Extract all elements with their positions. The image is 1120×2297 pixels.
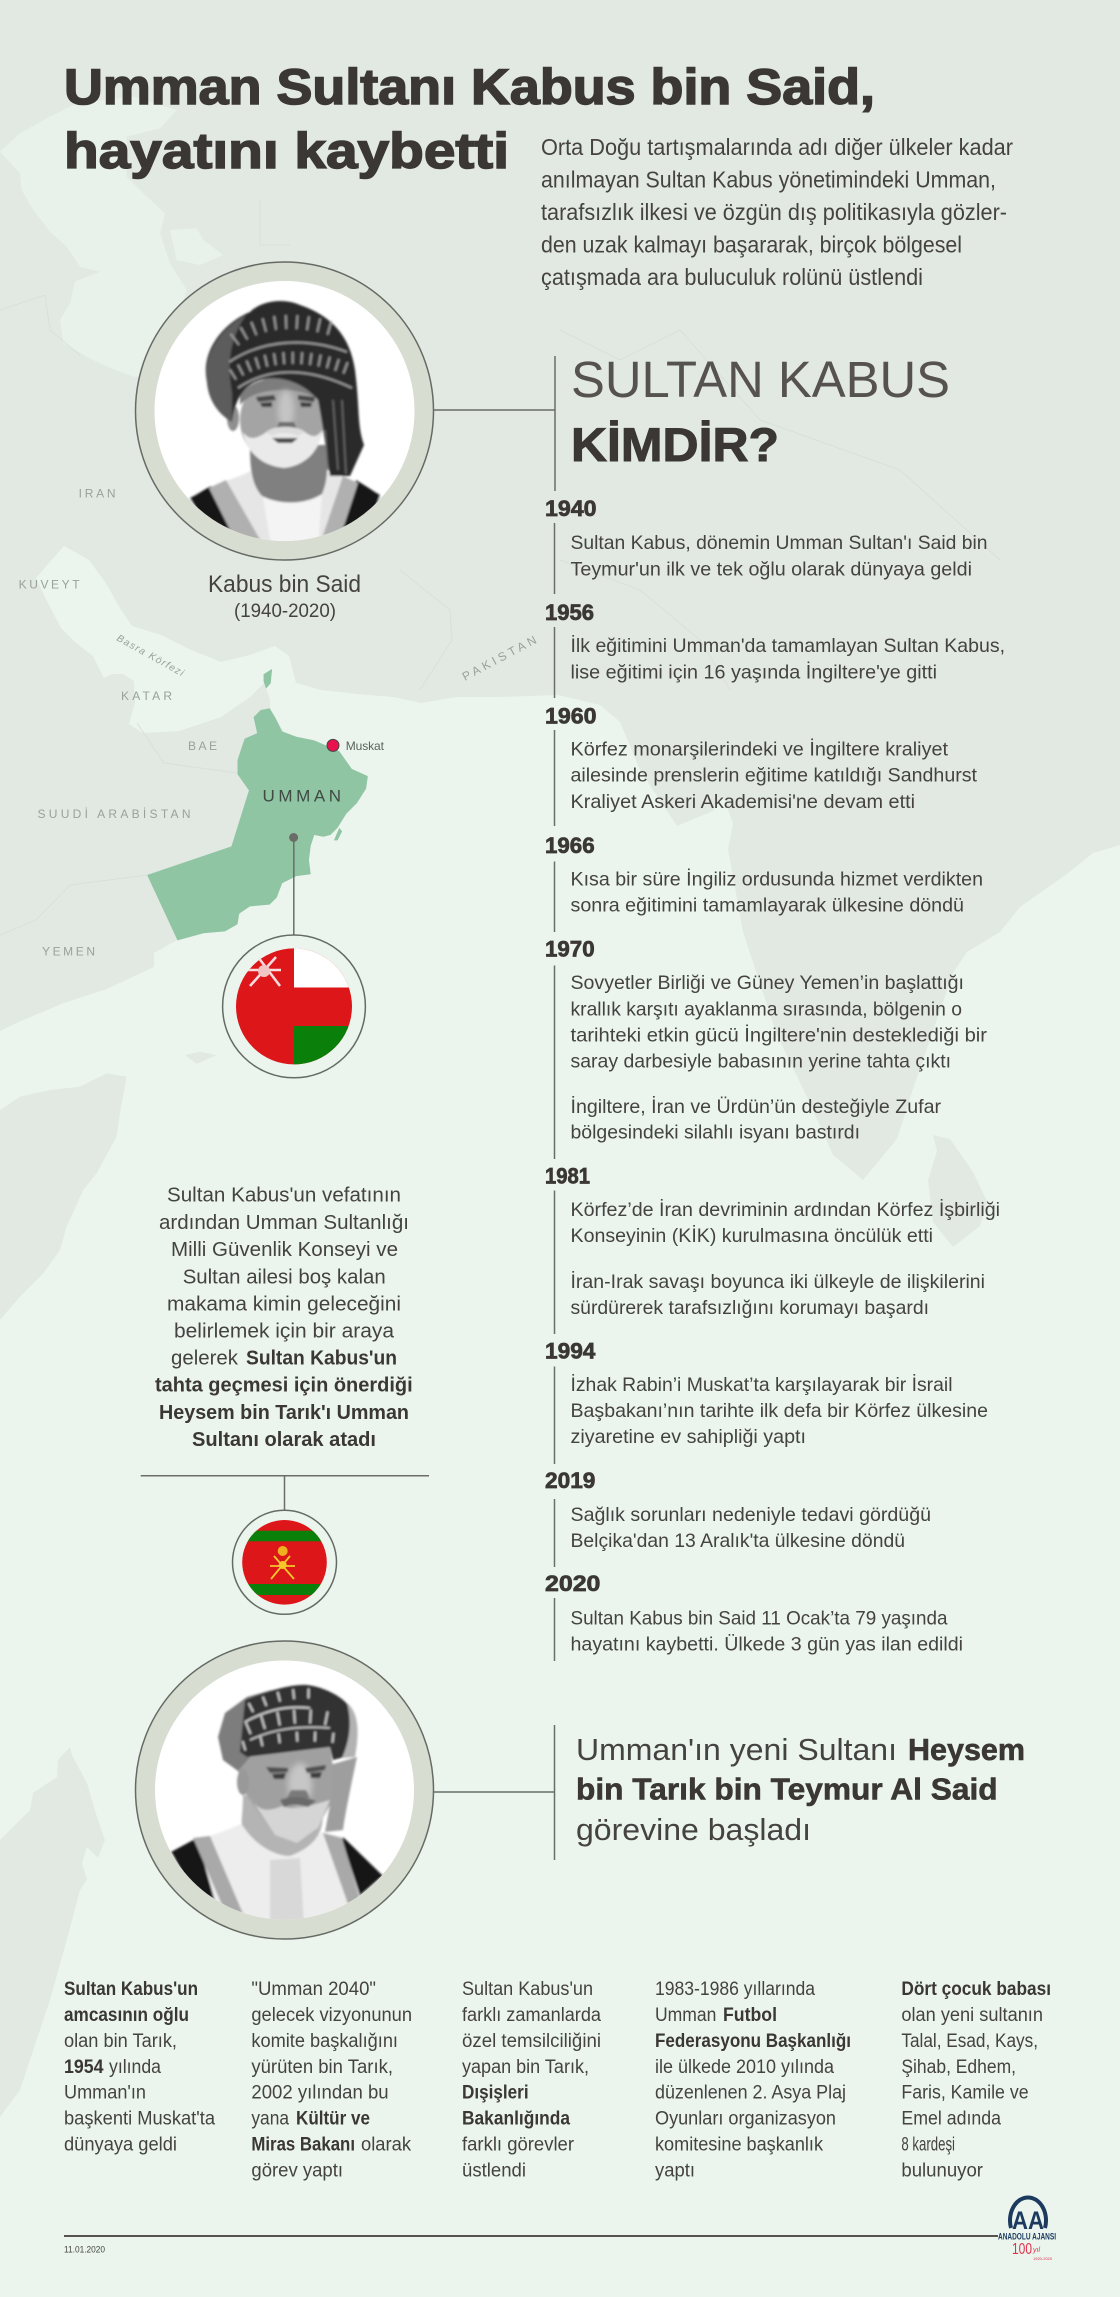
timeline: 1966: Kısa bir süre İngiliz ordusunda hizmet verdikten: [570, 868, 983, 891]
map labels: KUVEYT: [19, 578, 80, 592]
bio column 5: olan yeni sultanın: [901, 2005, 1043, 2026]
timeline: 1960: ailesinde prenslerin eğitime katıldığı Sandhurst: [570, 765, 978, 787]
timeline: 1956: 1956: [545, 600, 594, 625]
succession text block: Sultanı olarak atadı: [192, 1428, 376, 1451]
timeline: 1994: [545, 1339, 988, 1464]
bio column 1: yılında: [109, 2057, 161, 2078]
timeline: 1940: Sultan Kabus, dönemin Umman Sultan'ı Said bin: [570, 532, 988, 554]
bio column 4: [655, 1979, 851, 2182]
heading: Sultan Kabus kimdir: [555, 351, 950, 491]
intro paragraph: Orta Doğu tartışmalarında adı diğer ülkeler kadar: [541, 134, 1013, 160]
icon: royal flag of Oman: [232, 1510, 336, 1614]
bio column 2: "Umman 2040": [251, 1979, 376, 2000]
portrait: Heysem bin Tarık: [136, 1641, 434, 1939]
connector: text block to flag: [141, 1476, 429, 1510]
timeline: 1981: sürdürerek tarafsızlığını korumayı başardı: [570, 1297, 929, 1319]
map labels: Basra Körfezi: [115, 633, 186, 679]
timeline: 1960: Körfez monarşilerindeki ve İngiltere kraliyet: [570, 738, 949, 761]
bio column 1: [64, 1979, 215, 2156]
bio column 3: yapan bin Tarık,: [462, 2057, 589, 2078]
logo: Anadolu Ajansı: 1920-2020: [1033, 2256, 1053, 2261]
bio column 4: Oyunları organizasyon: [655, 2108, 836, 2130]
name caption: Kabus bin Said: Kabus bin Said: [208, 571, 361, 598]
bio column 5: Dört çocuk babası: [901, 1979, 1051, 2000]
Muskat marker: [327, 739, 385, 753]
succession text block: Sultan ailesi boş kalan: [183, 1265, 386, 1288]
timeline: 1994: Başbakanı’nın tarihte ilk defa bir Körfez ülkesine: [570, 1400, 988, 1422]
timeline: 1960: [545, 704, 978, 826]
logo: Anadolu Ajansı: [998, 2197, 1056, 2261]
bio column 3: farklı görevler: [462, 2134, 575, 2156]
Oman label: UMMAN: [262, 786, 341, 805]
title: hayatını kaybetti: [64, 123, 509, 179]
timeline: 1970: saray darbesiyle babasının yerine tahta çıktı: [570, 1050, 951, 1072]
heading: Sultan Kabus kimdir: KİMDİR?: [571, 418, 779, 471]
timeline: 1966: 1966: [545, 833, 595, 858]
succession text block: [155, 1184, 413, 1451]
timeline: 2019: Sağlık sorunları nedeniyle tedavi gördüğü: [570, 1504, 931, 1526]
map labels: PAKISTAN: [460, 633, 539, 684]
timeline: 1970: bölgesindeki silahlı isyanı bastırdı: [570, 1122, 860, 1144]
bio column 3: Dışişleri: [462, 2082, 529, 2104]
bio column 4: Umman: [655, 2005, 716, 2026]
map labels: KATAR: [121, 689, 172, 703]
bio column 4: komitesine başkanlık: [655, 2134, 823, 2156]
bio column 3: Bakanlığında: [462, 2108, 570, 2130]
bio column 2: Miras Bakanı: [251, 2134, 355, 2156]
bio column 2: yana: [251, 2108, 289, 2130]
callout: new sultan: Umman'ın yeni Sultanı: [576, 1732, 897, 1767]
timeline: 1994: ziyaretine ev sahipliği yaptı: [570, 1426, 806, 1448]
bio column 2: 2002 yılından bu: [251, 2082, 389, 2104]
succession text block: Sultan Kabus'un: [246, 1347, 397, 1370]
bio column 3: farklı zamanlarda: [462, 2005, 601, 2026]
bio column 5: bulunuyor: [901, 2160, 984, 2182]
bio column 5: Faris, Kamile ve: [901, 2082, 1029, 2104]
bio column 3: üstlendi: [462, 2160, 526, 2182]
name caption: Kabus bin Said: [208, 571, 361, 622]
bio column 4: Futbol: [723, 2005, 777, 2026]
callout: new sultan: bin Tarık bin Teymur Al Said: [576, 1771, 998, 1806]
succession text block: tahta geçmesi için önerdiği: [155, 1374, 413, 1397]
bio column 3: Sultan Kabus'un: [462, 1979, 593, 2000]
map labels: YEMEN: [42, 945, 95, 959]
timeline: 1970: krallık karşıtı ayaklanma sırasında, bölgenin o: [570, 998, 962, 1020]
callout: new sultan: görevine başladı: [576, 1812, 811, 1847]
map: Oman: [147, 669, 368, 940]
intro paragraph: [541, 134, 1013, 290]
bio column 5: 8 kardeşi: [901, 2134, 955, 2156]
bio column 3: özel temsilciliğini: [462, 2031, 601, 2052]
timeline: 1994: İzhak Rabin’i Muskat’ta karşılayarak bir İsrail: [570, 1373, 952, 1396]
timeline: 2020: Sultan Kabus bin Said 11 Ocak’ta 79 yaşında: [570, 1607, 948, 1629]
succession text block: gelerek: [171, 1347, 239, 1370]
heading: Sultan Kabus kimdir: SULTAN KABUS: [571, 351, 950, 408]
bio column 1: olan bin Tarık,: [64, 2031, 177, 2052]
timeline: 1970: tarihteki etkin gücü İngiltere'nin desteklediği bir: [570, 1023, 988, 1046]
timeline: 2020: hayatını kaybetti. Ülkede 3 gün yas ilan edildi: [570, 1634, 963, 1656]
timeline: 1981: İran-Irak savaşı boyunca iki ülkeyle de ilişkilerini: [570, 1270, 985, 1293]
succession text block: belirlemek için bir araya: [174, 1320, 395, 1343]
timeline: 1966: [545, 833, 983, 932]
bio column 2: yürüten bin Tarık,: [251, 2057, 393, 2078]
pointer: Oman to flag: [289, 833, 298, 935]
timeline: 1981: Konseyinin (KİK) kurulmasına öncülük etti: [570, 1224, 933, 1247]
map labels: BAE: [188, 739, 217, 753]
bio column 5: [901, 1979, 1051, 2182]
timeline: 1970: İngiltere, İran ve Ürdün’ün desteğiyle Zufar: [570, 1095, 942, 1118]
Muskat marker: Muskat: [346, 739, 385, 753]
logo: Anadolu Ajansı: ANADOLU AJANSI: [998, 2232, 1056, 2242]
bio column 5: Şihab, Edhem,: [901, 2057, 1016, 2078]
footer rule: [64, 2235, 998, 2237]
timeline: 1956: [545, 600, 1005, 698]
date: 11.01.2020: [64, 2245, 105, 2256]
succession text block: Heysem bin Tarık'ı Umman: [159, 1401, 409, 1424]
bio column 1: başkenti Muskat'ta: [64, 2108, 215, 2130]
timeline: 2020: 2020: [545, 1571, 600, 1596]
bio column 4: düzenlenen 2. Asya Plaj: [655, 2082, 846, 2104]
logo: Anadolu Ajansı: yıl: [1032, 2247, 1040, 2254]
bio column 4: ile ülkede 2010 yılında: [655, 2057, 834, 2078]
icon: flag of Oman: [223, 935, 365, 1078]
intro paragraph: den uzak kalmayı başararak, birçok bölgesel: [541, 232, 962, 258]
portrait: Kabus bin Said: [136, 262, 434, 560]
title: [64, 59, 875, 179]
intro paragraph: anılmayan Sultan Kabus yönetimindeki Umman,: [541, 166, 996, 192]
bio column 1: amcasının oğlu: [64, 2005, 189, 2026]
succession text block: makama kimin geleceğini: [167, 1292, 401, 1315]
timeline: 1981: Körfez’de İran devriminin ardından Körfez İşbirliği: [570, 1198, 1000, 1221]
timeline: 1981: [545, 1164, 1000, 1334]
callout: new sultan: Heysem: [908, 1732, 1025, 1767]
timeline: 1966: sonra eğitimini tamamlayarak ülkesine döndü: [570, 894, 964, 916]
bio column 2: olarak: [361, 2134, 411, 2156]
timeline: 1970: 1970: [545, 937, 595, 962]
timeline: 1956: lise eğitimi için 16 yaşında İngiltere'ye gitti: [570, 660, 937, 684]
name caption: Kabus bin Said: (1940-2020): [234, 601, 336, 622]
map labels: IRAN: [79, 486, 116, 500]
callout: new sultan: [554, 1725, 1025, 1860]
timeline: 1940: Teymur'un ilk ve tek oğlu olarak dünyaya geldi: [570, 558, 972, 580]
intro paragraph: çatışmada ara buluculuk rolünü üstlendi: [541, 264, 923, 290]
timeline: 2020: [545, 1571, 963, 1661]
timeline: 1970: Sovyetler Birliği ve Güney Yemen’in başlattığı: [570, 972, 964, 994]
timeline: 2019: [545, 1468, 931, 1567]
bio column 4: Federasyonu Başkanlığı: [655, 2031, 851, 2052]
intro paragraph: tarafsızlık ilkesi ve özgün dış politikasıyla gözler-: [541, 199, 1007, 225]
timeline: 1940: 1940: [545, 496, 596, 521]
bio column 4: 1983-1986 yıllarında: [655, 1979, 815, 2000]
bio column 5: Talal, Esad, Kays,: [901, 2031, 1038, 2052]
bio column 5: Emel adında: [901, 2108, 1001, 2130]
title: Umman Sultanı Kabus bin Said,: [64, 59, 875, 115]
logo: Anadolu Ajansı: AA: [1012, 2207, 1044, 2235]
bio column 1: Sultan Kabus'un: [64, 1979, 198, 2000]
timeline: 1960: Kraliyet Askeri Akademisi'ne devam etti: [570, 791, 915, 813]
succession text block: Sultan Kabus'un vefatının: [167, 1184, 401, 1207]
timeline: 1994: 1994: [545, 1339, 596, 1364]
timeline: 1970: [545, 937, 988, 1159]
timeline: 2019: Belçika'dan 13 Aralık'ta ülkesine döndü: [570, 1530, 905, 1552]
bio column 2: gelecek vizyonunun: [251, 2005, 412, 2026]
connector line to heading: [434, 409, 555, 411]
connector line to new sultan text: [434, 1791, 554, 1793]
bio column 2: [251, 1979, 412, 2182]
bio column 1: 1954: [64, 2057, 104, 2078]
timeline: 2019: 2019: [545, 1468, 595, 1493]
bio column 2: Kültür ve: [296, 2108, 370, 2130]
bio column 1: dünyaya geldi: [64, 2134, 177, 2156]
bio column 4: yaptı: [655, 2160, 695, 2182]
logo: Anadolu Ajansı: 100: [1012, 2241, 1032, 2258]
timeline: 1956: İlk eğitimini Umman'da tamamlayan Sultan Kabus,: [570, 634, 1005, 657]
bio column 1: Umman'ın: [64, 2082, 146, 2104]
succession text block: Milli Güvenlik Konseyi ve: [171, 1238, 398, 1261]
timeline: 1981: 1981: [545, 1164, 590, 1188]
bio column 2: komite başkalığını: [251, 2031, 398, 2052]
map labels: [19, 486, 539, 959]
map labels: SUUDİ ARABİSTAN: [38, 807, 190, 821]
bio column 2: görev yaptı: [251, 2160, 343, 2182]
timeline: 1940: [545, 496, 988, 594]
timeline: 1960: 1960: [545, 704, 596, 729]
succession text block: ardından Umman Sultanlığı: [159, 1211, 409, 1234]
bio column 3: [462, 1979, 601, 2182]
